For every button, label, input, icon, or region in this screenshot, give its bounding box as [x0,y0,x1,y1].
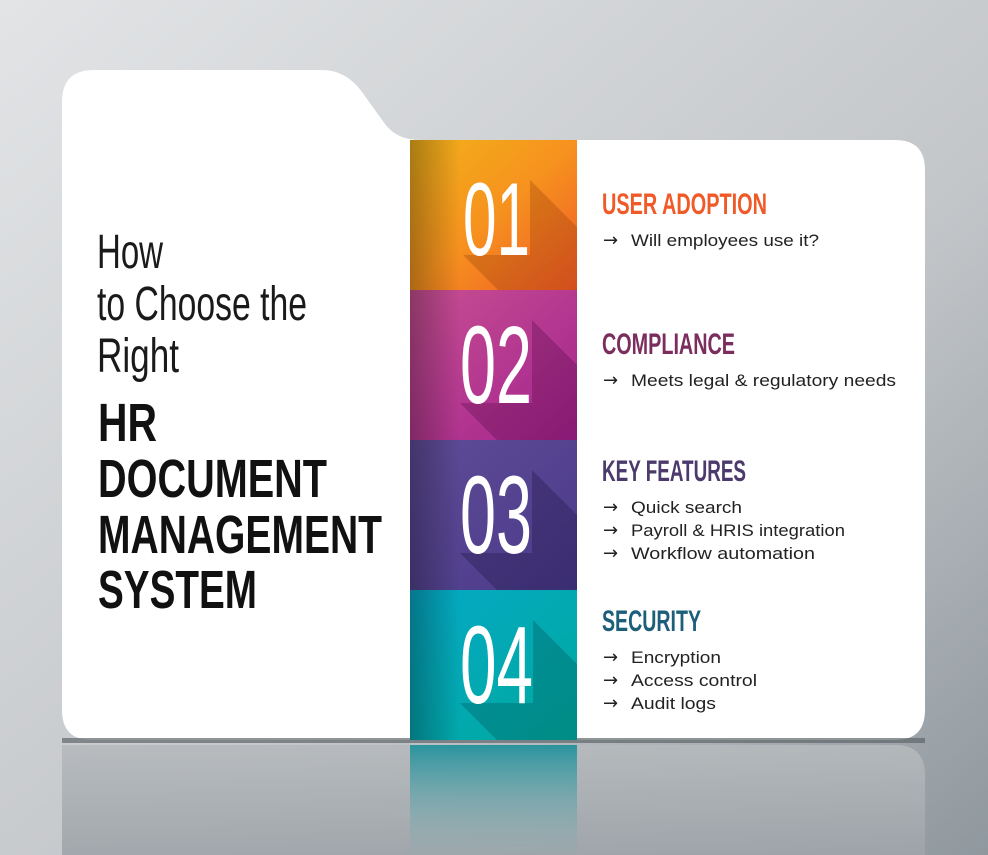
item: user adoption: → [603,230,618,251]
item: security: Encryption [631,648,721,667]
band 03: 03 [460,454,532,577]
band 01 [410,140,577,290]
item: security: → [603,670,618,691]
item: key features: → [603,497,618,518]
band 02 [410,290,577,440]
item: user adoption: USER ADOPTION [602,188,767,221]
band 01: 01 [463,162,530,278]
item: compliance: Meets legal & regulatory needs [631,371,896,390]
item: security: Access control [631,671,757,690]
title: Right [97,330,179,383]
item: key features: Payroll & HRIS integration [631,521,845,540]
band 04 [410,590,577,740]
item: key features: KEY FEATURES [602,455,746,488]
title: How [97,226,163,279]
band 02: 02 [460,304,532,427]
item: security: SECURITY [602,605,701,638]
item: security: → [603,647,618,668]
band 03 [410,440,577,590]
title: MANAGEMENT [98,505,382,565]
item: key features [602,455,845,564]
item: compliance: → [603,370,618,391]
item: compliance: COMPLIANCE [602,328,735,361]
item: user adoption [602,188,819,251]
item: security: → [603,693,618,714]
title: DOCUMENT [98,449,327,509]
title: SYSTEM [98,560,257,620]
reflection [62,745,925,855]
item: key features: Quick search [631,498,742,517]
item: compliance [602,328,896,391]
title: HR [98,393,157,453]
item: user adoption: Will employees use it? [631,231,819,250]
item: key features: Workflow automation [631,544,815,563]
item: security [602,605,757,714]
title [97,226,382,620]
item: security: Audit logs [631,694,716,713]
folder panel [62,70,925,743]
item: key features: → [603,543,618,564]
title: to Choose the [97,278,307,331]
item: key features: → [603,520,618,541]
band 04: 04 [460,604,533,727]
